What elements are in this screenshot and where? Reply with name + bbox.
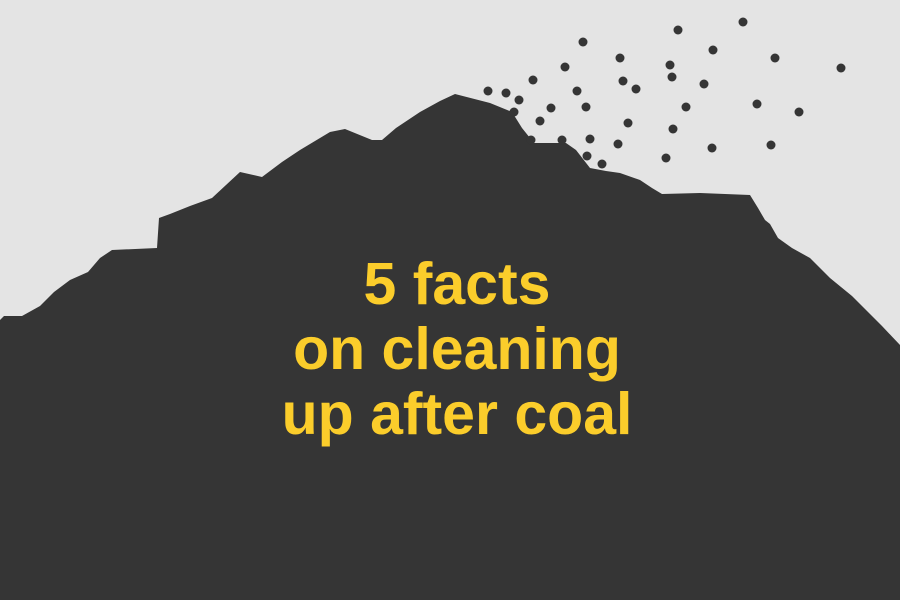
title: 5 facts — [364, 251, 550, 317]
coal particles — [484, 18, 846, 168]
title: up after coal — [282, 381, 632, 447]
title: on cleaning — [293, 316, 621, 382]
title — [282, 251, 632, 447]
